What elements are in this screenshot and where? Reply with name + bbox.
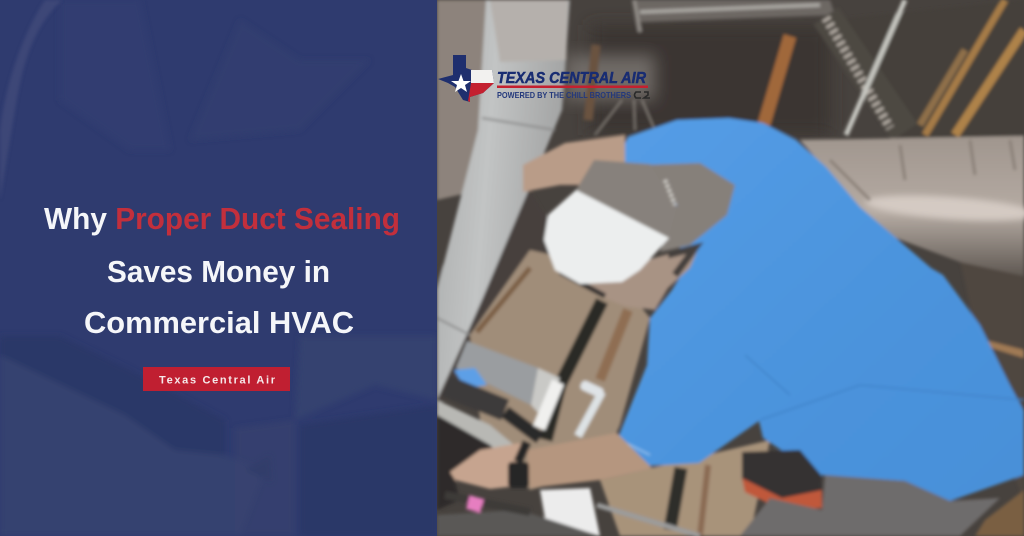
photo: air handler and piping	[437, 341, 605, 510]
photo: shirt	[615, 118, 1024, 501]
photo: dark attic background	[437, 0, 1024, 500]
icon: chill brothers mark	[634, 92, 650, 98]
icon: Texas flag state outline	[438, 55, 494, 102]
logo name: TEXAS CENTRAL AIR	[497, 70, 646, 87]
button: Texas Central Air	[143, 367, 290, 391]
photo: lower arm and hand	[450, 433, 652, 489]
panel: navy title background	[0, 0, 437, 536]
title	[44, 201, 400, 340]
photo: shirt shadow folds	[628, 396, 1024, 457]
photo: jeans	[740, 475, 1000, 536]
photo: flex duct	[826, 0, 905, 135]
photo: cap	[544, 160, 735, 284]
photo: lower foreground items	[437, 488, 1024, 536]
photo: upper arm	[523, 135, 625, 192]
photo: tool battery	[742, 450, 822, 510]
photo: overhead duct	[632, 0, 835, 32]
photo: face and hair	[560, 245, 700, 310]
photo: wood beams	[588, 0, 1024, 135]
photo: hanging strings	[595, 100, 654, 135]
photo: floor boards	[470, 250, 770, 536]
logo divider line	[497, 86, 648, 88]
button: Texas Central Air: Texas Central Air	[159, 374, 276, 386]
title line 3: Commercial HVAC	[84, 305, 354, 340]
panel decoration: faded pipe arc	[0, 0, 58, 184]
photo: large foil duct	[800, 136, 1024, 276]
photo: vertical metal duct	[437, 0, 570, 400]
title line 2: Saves Money in	[107, 254, 330, 289]
panel: photo of technician sealing ducts	[437, 0, 1024, 536]
logo: Texas Central Air	[438, 55, 650, 102]
logo tagline: POWERED BY THE CHILL BROTHERS	[497, 90, 631, 100]
title line 1: Why Proper Duct Sealing	[44, 201, 400, 236]
